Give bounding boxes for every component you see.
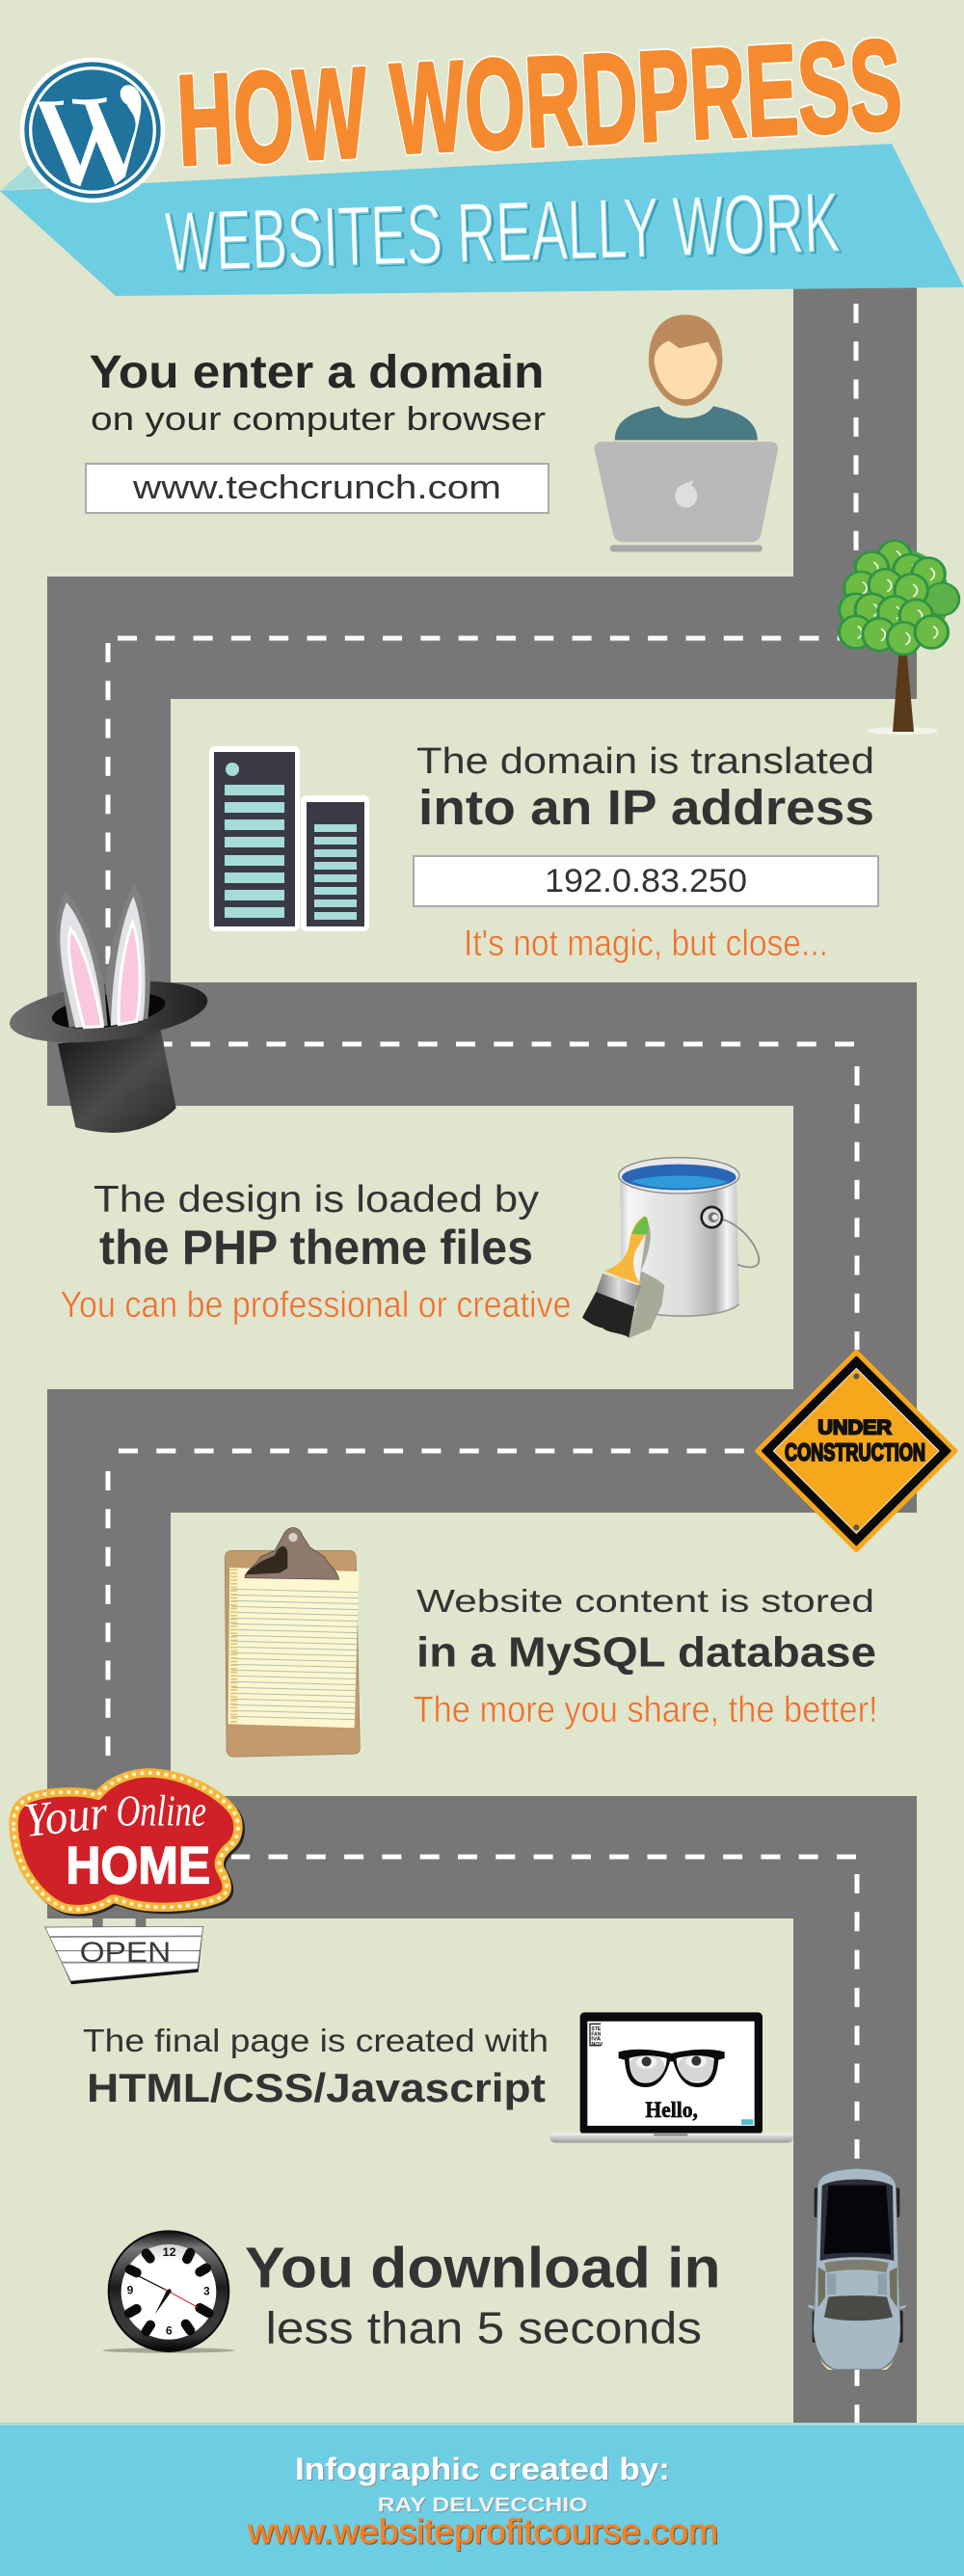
clock numerals: 3: [203, 2285, 210, 2298]
winding road: [47, 280, 917, 2424]
title: how wordpress: [174, 13, 905, 193]
step 1: enter a domain: [86, 347, 549, 513]
heading line 2: the PHP theme files: [99, 1221, 533, 1275]
icon: servers: [209, 746, 369, 931]
icon: clipboard: [225, 1528, 360, 1757]
website url: www.websiteprofitcourse.com: [247, 2511, 718, 2551]
clock numerals: 9: [127, 2284, 134, 2297]
brush shadow: [629, 1221, 664, 1338]
apple mark: [675, 480, 697, 508]
footer band: [0, 2423, 964, 2576]
left ear: [56, 892, 108, 1028]
sign script text: Your: [21, 1784, 110, 1847]
heading line 1: You download in: [245, 2237, 721, 2300]
icon: magic hat with rabbit ears: [7, 884, 211, 1133]
step 5: final page: [83, 2023, 549, 2110]
credit heading: Infographic created by:: [295, 2452, 670, 2486]
sign text: [785, 1414, 925, 1466]
screen logo: NOV: [591, 2042, 603, 2048]
icon: under construction sign: [758, 1353, 955, 1549]
url box: www.techcrunch.com: [132, 470, 501, 506]
screen logo: STE: [591, 2026, 602, 2032]
icon: your online home sign: [13, 1773, 240, 1984]
clip: [245, 1528, 339, 1579]
icon: pickup car: [807, 2168, 907, 2370]
title: how wordpress: HOW: [174, 41, 370, 193]
icon: person at laptop: [595, 315, 778, 551]
sign home text: HOME: [66, 1836, 210, 1894]
step 2: domain translated: [414, 741, 878, 964]
icon: wordpress logo: [20, 58, 165, 202]
brush: [582, 1216, 648, 1337]
sign script text: [21, 1784, 206, 1847]
step 4: mysql database: [414, 1583, 878, 1731]
sign script text: Online: [117, 1786, 206, 1835]
ip box: 192.0.83.250: [545, 863, 747, 899]
glasses: [619, 2050, 725, 2087]
tagline: You can be professional or creative: [60, 1285, 571, 1326]
url box: [86, 464, 549, 513]
heading line 2: HTML/CSS/Javascript: [87, 2065, 546, 2110]
road centre dashes: [108, 304, 857, 2424]
icon: tree: [840, 541, 959, 735]
tagline: It's not magic, but close...: [464, 924, 828, 964]
title: how wordpress: HOW: [174, 41, 370, 193]
icon: laptop with website: [549, 2012, 793, 2143]
open board: OPEN: [80, 1937, 171, 1969]
heading line 2: in a MySQL database: [416, 1629, 876, 1676]
heading line 1: The design is loaded by: [94, 1179, 540, 1221]
ip box: [414, 856, 878, 906]
heading line 2: less than 5 seconds: [266, 2303, 702, 2353]
author name: RAY DELVECCHIO: [378, 2494, 588, 2516]
handle: [720, 1219, 759, 1267]
open board: [45, 1926, 203, 1984]
heading line 1: The final page is created with: [83, 2023, 549, 2058]
icon: clock: [103, 2231, 234, 2353]
step 3: design loaded: [60, 1179, 571, 1326]
heading line 1: Website content is stored: [416, 1583, 874, 1619]
clock numerals: [127, 2245, 210, 2338]
screen logo: [590, 2024, 603, 2048]
icon: laptop with website: Hello,: [645, 2098, 698, 2123]
header banner: [0, 140, 964, 296]
final text: you download: [245, 2237, 721, 2353]
screen logo: IVA: [591, 2037, 601, 2043]
subheading: on your computer browser: [91, 401, 546, 438]
sign text: UNDER: [817, 1414, 892, 1438]
heading line 1: The domain is translated: [416, 741, 874, 782]
clock numerals: 12: [163, 2245, 176, 2259]
tagline: The more you share, the better!: [414, 1690, 878, 1731]
icon: paint can and brush: [582, 1158, 759, 1338]
right ear: [105, 884, 150, 1026]
screen logo: FAN: [591, 2031, 601, 2037]
clock numerals: 6: [166, 2324, 173, 2338]
heading: You enter a domain: [89, 347, 544, 398]
heading line 2: into an IP address: [418, 780, 874, 835]
